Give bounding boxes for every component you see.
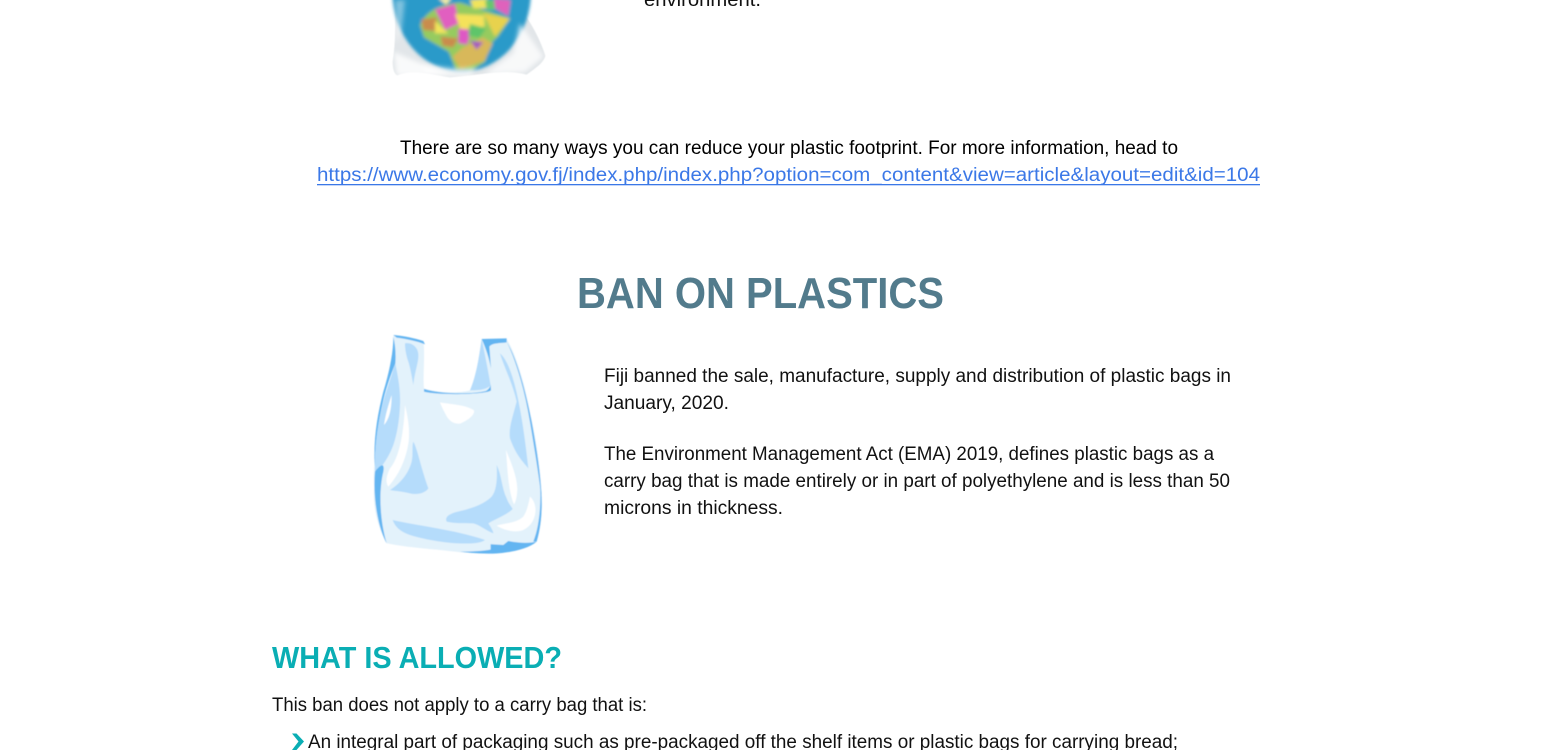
paragraph: EMA definition: The Environment Management Act (EMA) 2019, defines plastic bags as a xyxy=(604,444,1214,465)
text: exemption intro: This ban does not apply to a carry bag that is: xyxy=(272,695,647,716)
icon: globe wrapped in plastic bag xyxy=(390,0,545,77)
text block: reduce your plastic footprint xyxy=(317,138,1260,186)
link: https://www.economy.gov.fj/index.php/index.php?option=com_content&view=article&layout=edit&id=104 xyxy=(317,165,1260,186)
intro sentence: There are so many ways you can reduce your plastic footprint. For more information, head to xyxy=(400,138,1178,159)
paragraph: EMA definition: microns in thickness. xyxy=(604,498,783,519)
paragraph: ban date: Fiji banned the sale, manufacture, supply and distribution of plastic bags in xyxy=(604,366,1231,387)
icon: plastic carry bag xyxy=(374,335,542,554)
heading: what is allowed: WHAT IS ALLOWED? xyxy=(272,640,562,675)
text block: fiji ban description xyxy=(604,366,1231,519)
icon: chevron xyxy=(292,734,304,750)
paragraph: ban date xyxy=(604,366,1231,414)
paragraph: EMA definition xyxy=(604,444,1230,519)
heading: ban on plastics: BAN ON PLASTICS xyxy=(577,269,944,318)
paragraph: EMA definition: carry bag that is made entirely or in part of polyethylene and is less than 50 xyxy=(604,471,1230,492)
paragraph: ban date: January, 2020. xyxy=(604,393,729,414)
